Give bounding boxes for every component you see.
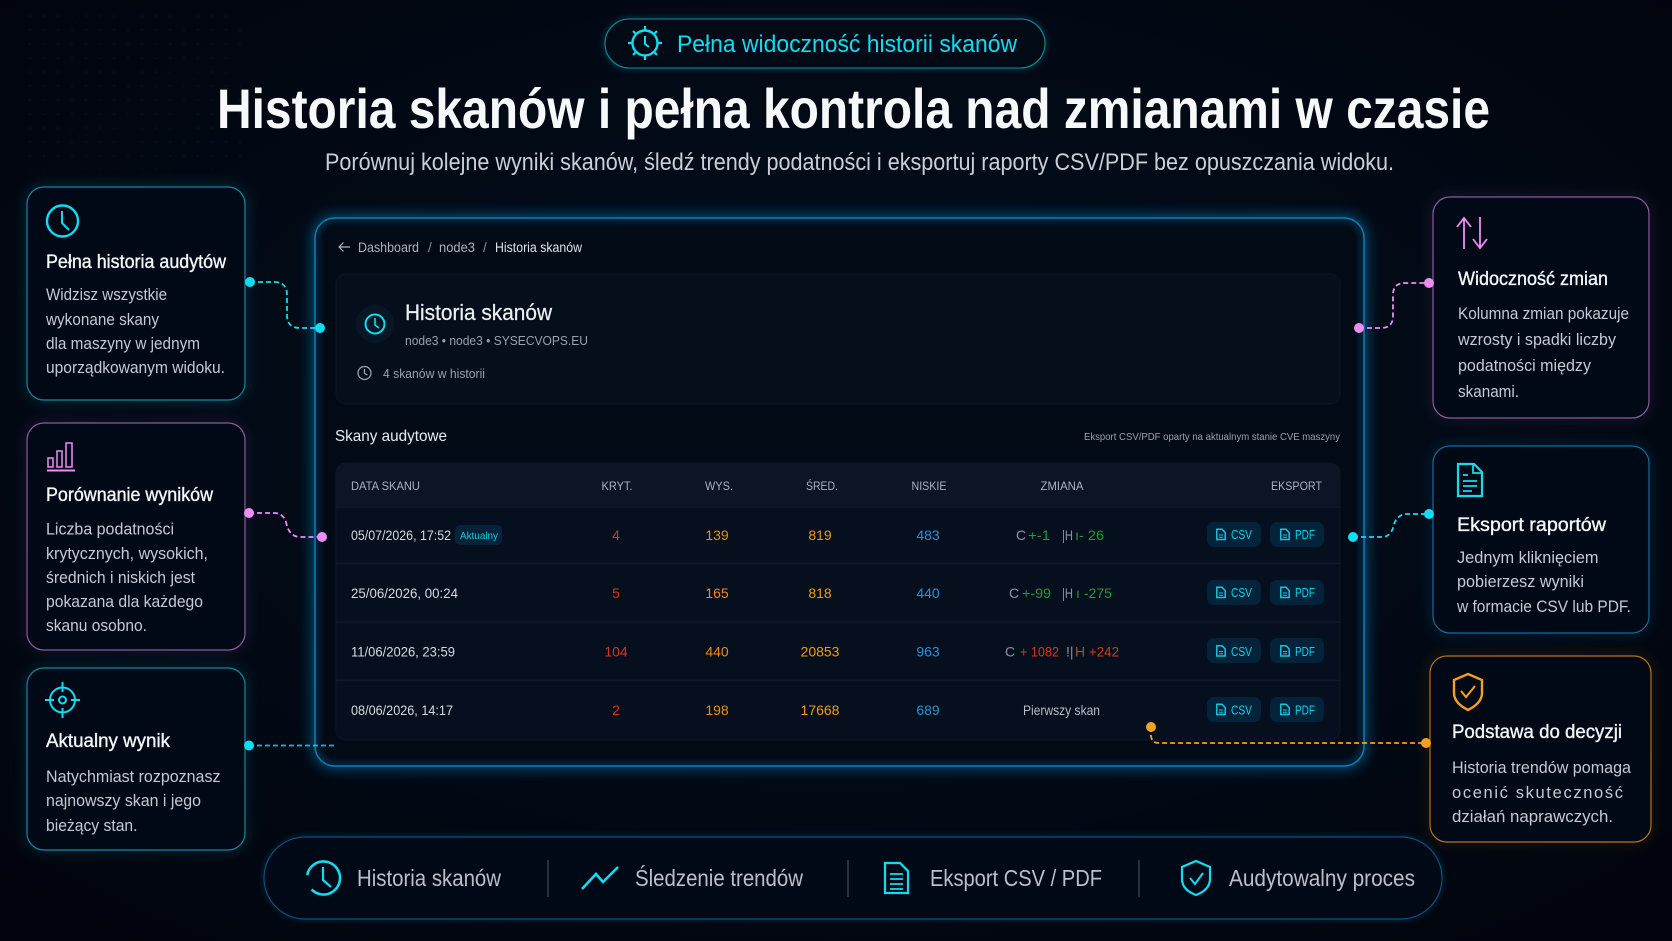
row 3: 11/06/2026, 23:59 xyxy=(351,644,455,660)
row 1: |H xyxy=(1062,527,1073,543)
card: Podstawa do decyzji: Podstawa do decyzji xyxy=(1452,722,1622,743)
feature: trend tracking: Śledzenie trendów xyxy=(635,864,803,891)
card: Aktualny wynik: najnowszy skan i jego xyxy=(46,792,201,810)
connector: decision card to table xyxy=(1146,722,1431,748)
card: Widoczność zmian: Kolumna zmian pokazuje xyxy=(1458,305,1629,323)
card: Porównanie wyników xyxy=(27,423,245,650)
row 2: 25/06/2026, 00:24 xyxy=(351,586,458,601)
row 2: 165 xyxy=(705,585,729,601)
card: Porównanie wyników: pokazana dla każdego xyxy=(46,593,203,611)
feature: auditable process: Audytowalny proces xyxy=(1229,865,1415,891)
row 3: H xyxy=(1075,644,1085,660)
icon: small clock xyxy=(358,366,371,380)
row 2 xyxy=(351,580,1324,605)
breadcrumb: Historia skanów xyxy=(495,240,582,255)
card: Widoczność zmian: podatności między xyxy=(1458,357,1592,375)
row 2: CSV xyxy=(1231,585,1252,600)
row 3: 440 xyxy=(705,644,729,660)
card: Eksport raportów: pobierzesz wyniki xyxy=(1457,573,1584,591)
table xyxy=(336,463,1340,740)
table header xyxy=(351,478,1323,493)
row 4: 198 xyxy=(705,702,729,718)
card: Widoczność zmian: Widoczność zmian xyxy=(1458,269,1608,290)
table header: NISKIE xyxy=(912,479,946,493)
table header: WYS. xyxy=(705,479,733,493)
row 1: C xyxy=(1016,527,1026,543)
feature: trend tracking xyxy=(582,864,803,891)
icon: history clock xyxy=(356,305,394,343)
icon: clock badge xyxy=(628,26,662,60)
table header: DATA SKANU xyxy=(351,479,420,493)
icon: target xyxy=(45,682,80,718)
card: Aktualny wynik: Aktualny wynik xyxy=(46,731,170,752)
row 2: C xyxy=(1009,585,1019,601)
row 3: CSV xyxy=(1231,644,1252,659)
feature: scan history: Historia skanów xyxy=(357,865,501,891)
feature: scan history xyxy=(304,859,501,897)
card: Pełna historia audytów: uporządkowanym widoku. xyxy=(46,359,225,377)
header card xyxy=(336,274,1340,404)
icon: document xyxy=(1458,464,1482,496)
card: Porównanie wyników: skanu osobno. xyxy=(46,617,147,635)
row 3: C xyxy=(1005,644,1015,660)
card: Aktualny wynik: Natychmiast rozpoznasz xyxy=(46,768,220,786)
row 4: 17668 xyxy=(801,702,840,718)
icon: up down arrows xyxy=(1457,217,1487,249)
row 3: !| xyxy=(1066,644,1074,660)
header card: 4 skanów w historii xyxy=(383,366,485,381)
row 2: 818 xyxy=(808,585,832,601)
row 4: Pierwszy skan xyxy=(1023,702,1100,718)
row 4: 2 xyxy=(612,702,620,718)
row 3: +242 xyxy=(1089,644,1119,660)
row 2: PDF xyxy=(1295,585,1315,600)
card: Podstawa do decyzji: Historia trendów pomaga xyxy=(1452,759,1632,777)
card: Podstawa do decyzji xyxy=(1430,656,1651,842)
icon: clock xyxy=(47,206,78,236)
row 1 xyxy=(351,522,1324,547)
row 4: 689 xyxy=(916,702,940,718)
connector: changes card to panel xyxy=(1354,278,1434,333)
row 1: 819 xyxy=(808,527,832,543)
card: Eksport raportów: w formacie CSV lub PDF. xyxy=(1456,598,1631,616)
top badge: Pełna widoczność historii skanów xyxy=(677,31,1018,58)
table header: ZMIANA xyxy=(1040,479,1084,493)
card: Porównanie wyników: średnich i niskich jest xyxy=(46,569,195,587)
card: Pełna historia audytów: wykonane skany xyxy=(45,311,160,329)
row 1: 4 xyxy=(612,527,620,543)
badge: current: Aktualny xyxy=(460,530,499,542)
row 2: |H xyxy=(1062,585,1073,601)
row 4 xyxy=(351,697,1324,722)
title: Historia skanów i pełna kontrola nad zmianami w czasie xyxy=(217,77,1490,140)
card: Pełna historia audytów xyxy=(27,187,245,400)
card: Porównanie wyników: krytycznych, wysokich, xyxy=(46,545,208,563)
row 3 xyxy=(351,638,1324,663)
export note: Eksport CSV/PDF oparty na aktualnym stanie CVE maszyny xyxy=(1084,431,1341,443)
card: Pełna historia audytów: Pełna historia audytów xyxy=(46,252,226,273)
breadcrumb: / xyxy=(428,240,432,255)
card: Porównanie wyników: Liczba podatności xyxy=(46,520,174,538)
card: Widoczność zmian: wzrosty i spadki liczby xyxy=(1457,331,1617,349)
row 2: ı -275 xyxy=(1076,585,1112,601)
table header: KRYT. xyxy=(602,479,632,493)
row 1: PDF xyxy=(1295,527,1315,542)
breadcrumb: node3 xyxy=(439,240,475,255)
row 3: 20853 xyxy=(801,644,840,660)
row 3: PDF xyxy=(1295,644,1315,659)
feature: csv pdf export xyxy=(885,863,1102,893)
row 3: + 1082 xyxy=(1020,644,1059,660)
connector: comparison card to table xyxy=(244,508,327,542)
table header: EKSPORT xyxy=(1271,479,1323,493)
breadcrumb: / xyxy=(483,240,487,255)
card: Eksport raportów xyxy=(1433,446,1649,633)
row 2: 440 xyxy=(916,585,940,601)
table header: ŚRED. xyxy=(806,478,838,493)
row 1: 05/07/2026, 17:52 xyxy=(351,528,451,543)
row 2: +-99 xyxy=(1022,585,1051,601)
breadcrumb xyxy=(339,240,582,255)
row 1: ı- 26 xyxy=(1075,527,1104,543)
top badge xyxy=(605,19,1045,68)
subtitle: Porównuj kolejne wyniki skanów, śledź trendy podatności i eksportuj raporty CSV/PDF bez opuszczania widoku. xyxy=(325,149,1394,176)
card: Eksport raportów: Jednym kliknięciem xyxy=(1457,549,1598,567)
row 3: 963 xyxy=(916,644,940,660)
card: Widoczność zmian: skanami. xyxy=(1458,383,1519,401)
row 1: 139 xyxy=(705,527,729,543)
card: Porównanie wyników: Porównanie wyników xyxy=(46,485,213,506)
card: Aktualny wynik xyxy=(27,668,245,850)
row 2: 5 xyxy=(612,585,620,601)
header card: node3 • node3 • SYSECVOPS.EU xyxy=(405,333,588,348)
connector: export card to buttons xyxy=(1348,509,1434,542)
row 4: 08/06/2026, 14:17 xyxy=(351,703,453,718)
card: Podstawa do decyzji: działań naprawczych. xyxy=(1452,808,1613,826)
row 4: CSV xyxy=(1231,702,1252,718)
feature: auditable process xyxy=(1182,861,1415,895)
icon: shield check xyxy=(1454,674,1482,710)
connector: history card to panel xyxy=(245,277,325,333)
breadcrumb: Dashboard xyxy=(358,240,419,255)
icon: bars xyxy=(47,443,75,470)
card: Podstawa do decyzji: ocenić skuteczność xyxy=(1452,784,1623,802)
card: Pełna historia audytów: Widzisz wszystkie xyxy=(46,286,167,304)
section heading: Skany audytowe xyxy=(335,428,447,445)
header card: Historia skanów xyxy=(405,300,552,325)
row 1: 483 xyxy=(916,527,940,543)
card: Pełna historia audytów: dla maszyny w jednym xyxy=(46,335,200,353)
panel: main dashboard xyxy=(315,218,1364,766)
badge: current xyxy=(455,525,502,545)
bottom feature bar xyxy=(264,837,1442,919)
row 3: 104 xyxy=(604,644,628,660)
card: Aktualny wynik: bieżący stan. xyxy=(46,817,138,835)
row 1: CSV xyxy=(1231,527,1252,542)
row 4: PDF xyxy=(1295,702,1315,718)
card: Widoczność zmian xyxy=(1433,197,1649,418)
card: Eksport raportów: Eksport raportów xyxy=(1457,515,1606,536)
connector: current result xyxy=(244,740,335,750)
row 1: +-1 xyxy=(1028,527,1050,543)
feature: csv pdf export: Eksport CSV / PDF xyxy=(930,865,1102,891)
